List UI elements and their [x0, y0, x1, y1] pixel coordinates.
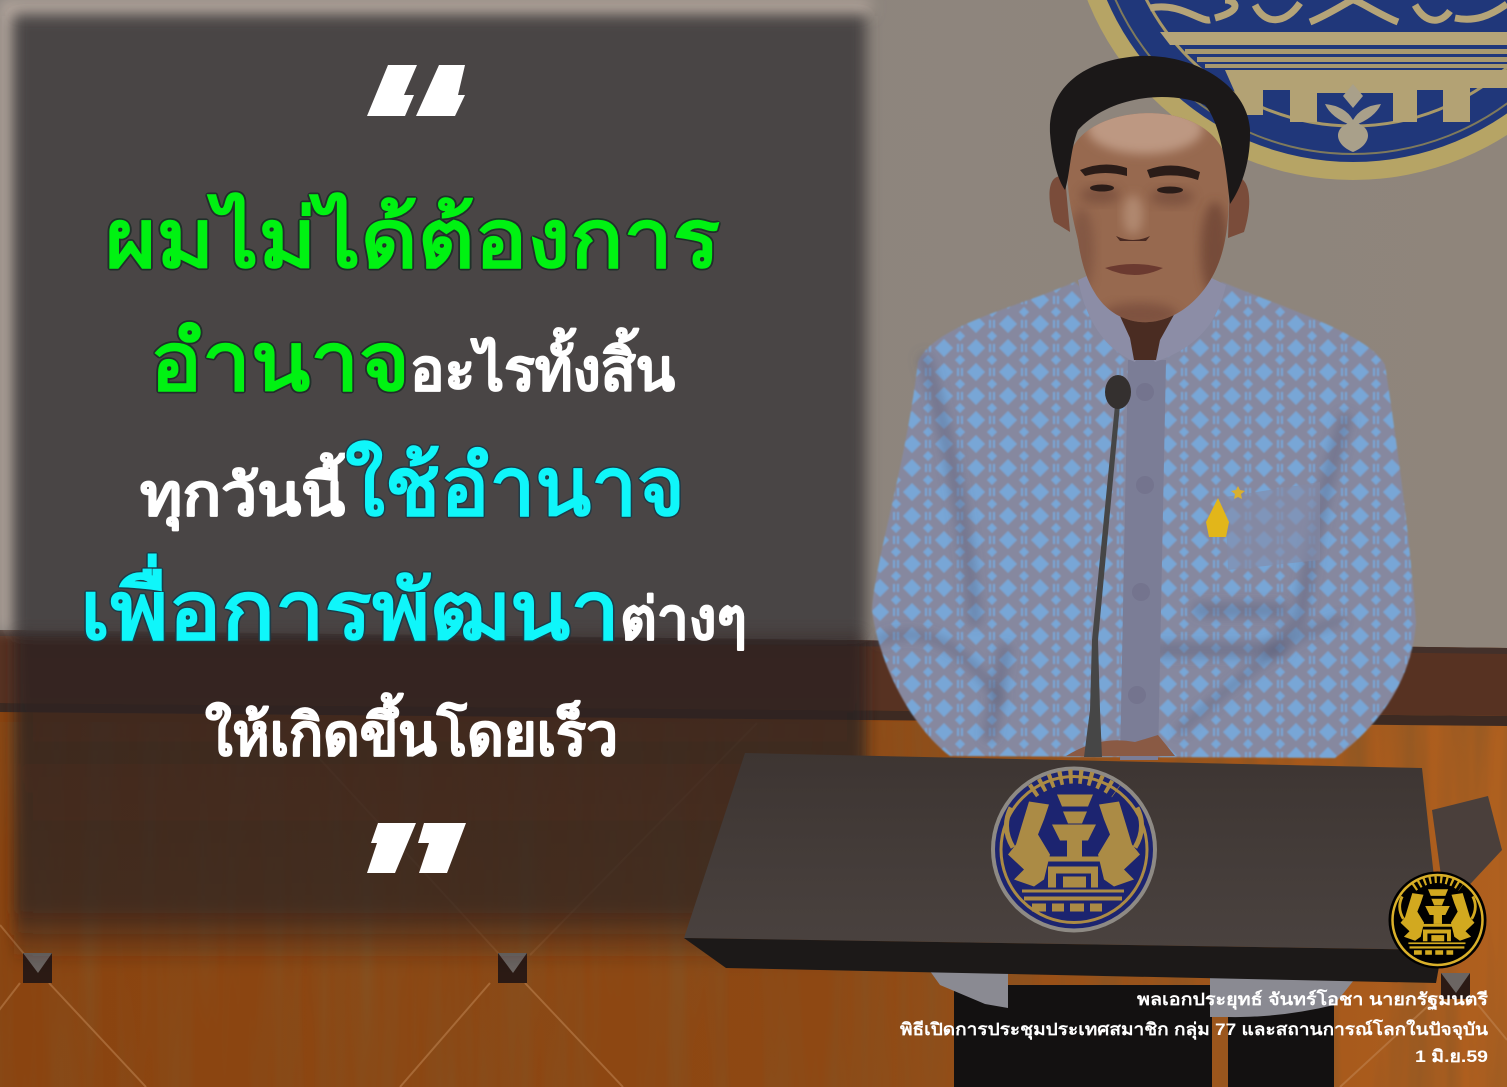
caption block: พิธีเปิดการประชุมประเทศสมาชิก กลุ่ม 77 และสถานการณ์โลกในปัจจุบัน: [900, 1019, 1488, 1040]
hair: [1050, 56, 1250, 204]
headline line 3: ใช้อำนาจ: [345, 440, 685, 533]
closing quote mark: [367, 823, 466, 873]
caption block: [900, 989, 1489, 1066]
jacket fold shadows: [880, 360, 1345, 735]
lapel pin and star: [1206, 486, 1245, 537]
headline line 3: ทุกวันนี้: [140, 453, 347, 532]
caption block: พลเอกประยุทธ์ จันทร์โอชา นายกรัฐมนตรี: [1137, 989, 1489, 1011]
collar: [1078, 270, 1226, 362]
decorative wall studs: [23, 953, 1470, 999]
emblem scrollwork: [1150, 0, 1507, 22]
trousers: [954, 985, 1334, 1087]
pocket: [1225, 482, 1320, 570]
headline line 5: ให้เกิดขึ้นโดยเร็ว: [205, 693, 618, 768]
pale halo behind quote panel: [0, 0, 870, 630]
microphone: [1084, 375, 1131, 757]
emblem bands: [1160, 32, 1507, 45]
opening quote mark: [367, 65, 465, 116]
figure: speaker in blue silk jacket: [872, 56, 1416, 1087]
headline line 2: อะไรทั้งสิ้น: [410, 328, 675, 403]
emblem feet: [1225, 70, 1507, 122]
headline line 1: ผมไม่ได้ต้องการ: [105, 192, 720, 285]
headline line 4: [80, 553, 747, 657]
headline line 2: [150, 317, 675, 408]
headline line 2: อำนาจ: [150, 317, 410, 408]
buttons: [1128, 383, 1154, 704]
neck: [1098, 268, 1200, 360]
lectern seal: [991, 766, 1157, 932]
lower jacket hem: [922, 960, 1362, 1017]
headline line 3: [140, 440, 685, 533]
eyes, nose and mouth: [1080, 164, 1200, 275]
face: [1068, 113, 1229, 322]
headline line 4: เพื่อการพัฒนา: [80, 553, 620, 657]
placket: [1120, 360, 1166, 760]
lectern: [684, 753, 1502, 983]
wall emblem: Thai government seal: [1067, 0, 1507, 180]
dark translucent quote panel: [14, 16, 866, 966]
caption block: 1 มิ.ย.59: [1415, 1047, 1488, 1066]
face shading: [1070, 102, 1229, 327]
hands: [1066, 735, 1175, 756]
ears: [1049, 176, 1249, 238]
headline line 4: ต่างๆ: [620, 587, 747, 652]
jacket body: [872, 282, 1416, 758]
logo: black and gold government seal: [1388, 872, 1486, 968]
